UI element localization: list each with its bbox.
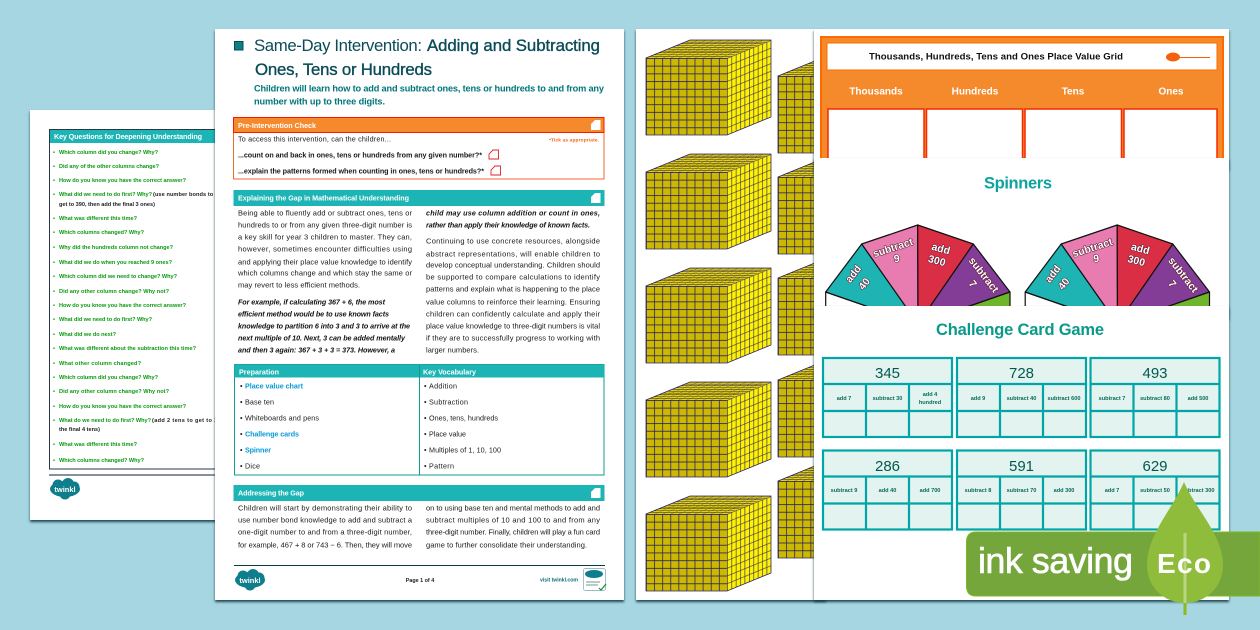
text block: explaining the gap right column: abstract representations, will enable children to	[426, 250, 600, 258]
question list: Did any other column change? Why not?	[59, 289, 170, 295]
subtitle: Children will learn how to add and subtract ones, tens or hundreds to and from any	[254, 84, 605, 94]
column headings: Ones	[1158, 86, 1184, 98]
panel: preparation and vocabulary table: •	[240, 462, 243, 470]
banner	[966, 532, 1260, 596]
card 493	[1090, 358, 1220, 437]
question list: How do you know you have the correct answer?	[59, 303, 187, 309]
chart: spinner right	[1025, 225, 1210, 330]
icon: checkbox	[491, 166, 500, 175]
card 286: add 700	[920, 488, 940, 494]
card 345: 345	[875, 365, 900, 382]
question list: What was different this time?	[59, 442, 138, 448]
icon: leaf	[1147, 482, 1223, 603]
question list: Did any other column change? Why not?	[59, 389, 170, 395]
question list: How do you know you have the correct answer?	[59, 404, 187, 410]
question list: the final 4 tens)	[59, 427, 100, 433]
text block: explaining the gap left column: which columns change and which stay the same or	[237, 268, 412, 278]
question list: What did we do when you reached 9 ones?	[59, 260, 173, 266]
chart: spinner left	[826, 225, 1010, 330]
card 629: subtract 50	[1140, 488, 1170, 494]
question list: •	[53, 216, 55, 222]
base ten cube column one	[646, 40, 771, 591]
question list: What was different this time?	[59, 216, 138, 222]
icon: twinkl logo	[50, 478, 80, 500]
heading: place value grid title	[827, 43, 1217, 70]
title	[254, 36, 600, 79]
grid cells	[828, 109, 1217, 169]
question list: What do we need to do first? Why?	[59, 418, 152, 424]
text block: addressing the gap: for example, 467 + 8 or 743 − 6. Then, they will move	[238, 540, 412, 550]
panel: preparation and vocabulary table: •	[240, 414, 243, 422]
card 345: subtract 30	[873, 396, 902, 402]
card 728	[957, 358, 1086, 437]
panel: key questions page	[30, 110, 230, 520]
title: Adding and Subtracting	[427, 36, 600, 55]
text block: explaining the gap right column: children can confidently calculate and apply their	[426, 310, 600, 318]
panel: preparation and vocabulary table: Pattern	[429, 462, 454, 470]
panel: preparation and vocabulary table: •	[240, 430, 243, 438]
text block: addressing the gap: one-digit number to and from a three-digit number,	[238, 528, 412, 536]
panel: pre-intervention check: ...explain the patterns formed when counting in ones, tens or hundreds?*	[238, 166, 484, 176]
panel: pre-intervention check	[234, 118, 604, 179]
panel: preparation and vocabulary table: •	[240, 446, 243, 454]
question list: (use number bonds to add	[153, 192, 226, 198]
question list: •	[53, 346, 55, 352]
column headings: Thousands	[849, 86, 903, 98]
text block: explaining the gap left column: and then 3 again: 367 + 3 + 3 = 373. However, a	[238, 346, 395, 354]
question list: get to 390, then add the final 3 ones)	[59, 202, 155, 208]
question list: Which columns changed? Why?	[59, 230, 145, 236]
card 591: add 300	[1054, 488, 1074, 494]
card 728: 728	[1009, 365, 1034, 382]
panel: preparation and vocabulary table: •	[424, 382, 427, 390]
question list: •	[53, 442, 55, 448]
question list: What was different about the subtraction this time?	[59, 346, 197, 352]
question list: •	[53, 289, 55, 295]
chart: spinner right: subtract	[1071, 236, 1115, 260]
footer link: visit twinkl.com	[540, 578, 578, 584]
question list: •	[53, 404, 55, 410]
card 286	[823, 450, 952, 530]
banner text: ink saving	[978, 540, 1133, 581]
question list: Which column did you change? Why?	[59, 150, 159, 156]
card 629: add 7	[1105, 488, 1119, 494]
question list: •	[53, 230, 55, 236]
text block: explaining the gap right column: patterns and explain what is happening to the place	[426, 284, 600, 294]
question list: •	[53, 418, 55, 424]
heading: key questions	[50, 130, 230, 143]
card 728: add 9	[971, 396, 985, 402]
question list: What did we do next?	[59, 332, 117, 338]
panel: preparation and vocabulary table: •	[424, 414, 427, 422]
panel: preparation and vocabulary table: Preparation	[239, 368, 279, 376]
card 493: add 500	[1188, 396, 1208, 402]
heading: key questions: Key Questions for Deepening Understanding	[54, 132, 202, 141]
card 493: subtract 80	[1140, 396, 1170, 402]
panel: pre-intervention check: *Tick as appropriate.	[549, 138, 599, 144]
question list: •	[53, 317, 55, 323]
question list: •	[53, 303, 55, 309]
page number: Page 1 of 4	[406, 578, 434, 584]
text block: explaining the gap left column	[237, 208, 412, 354]
card 591: subtract 70	[1007, 488, 1036, 494]
panel: preparation and vocabulary table: Dice	[245, 462, 260, 470]
icon: twinkl logo: twinkl	[239, 576, 261, 585]
question list: Which column did you change? Why?	[59, 375, 159, 381]
text block: explaining the gap right column: develop conceptual understanding. Children should	[426, 260, 600, 270]
question list: •	[53, 332, 55, 338]
panel: preparation and vocabulary table: •	[424, 430, 427, 438]
chart: spinner right: add	[1043, 263, 1064, 285]
question list: •	[53, 375, 55, 381]
panel: spinners page	[814, 158, 1229, 330]
text block: addressing the gap: Children will start by demonstrating their ability to	[238, 504, 412, 512]
chart: spinner right: 9	[1093, 253, 1100, 265]
question list: •	[53, 458, 55, 464]
subtitle: number with up to three digits.	[254, 96, 385, 106]
question list: •	[53, 361, 55, 367]
text block: explaining the gap right column: larger numbers.	[426, 346, 479, 354]
panel: preparation and vocabulary table: Subtraction	[429, 398, 468, 406]
text block: explaining the gap left column: hundreds to or from any given three-digit number is	[238, 220, 412, 230]
icon: checkbox	[489, 150, 498, 159]
text block: explaining the gap right column	[426, 208, 600, 354]
text block: explaining the gap right column: be supported to compare calculations to identify	[426, 272, 600, 282]
heading: challenge card game: Challenge Card Game	[936, 321, 1104, 339]
question list: •	[53, 274, 55, 280]
panel: base ten cubes page	[636, 29, 903, 600]
card 286: 286	[875, 458, 900, 475]
column headings: Hundreds	[952, 86, 999, 98]
chart: spinner right: 300	[1126, 253, 1146, 269]
title: Ones, Tens or Hundreds	[255, 60, 432, 79]
question list: •	[53, 192, 55, 198]
text block: explaining the gap right column: child may use column addition or count in ones,	[426, 208, 600, 218]
card 591: subtract 8	[965, 488, 991, 494]
panel: preparation and vocabulary table: Key Vocabulary	[423, 368, 476, 376]
panel: preparation and vocabulary table: Spinner	[245, 446, 271, 454]
question list: •	[53, 260, 55, 266]
column headings	[849, 86, 1184, 98]
chart: spinner left: subtract	[966, 255, 1001, 296]
text block: explaining the gap left column: Being able to fluently add or subtract ones, tens or	[238, 208, 412, 218]
chart: spinner left: 7	[966, 278, 979, 290]
card 493: 493	[1142, 365, 1168, 382]
heading: addressing the gap: Addressing the Gap	[238, 488, 305, 498]
panel: pre-intervention check: ...count on and back in ones, tens or hundreds from any given number?*	[238, 150, 482, 160]
base ten cube column two	[778, 58, 903, 558]
panel: preparation and vocabulary table: •	[424, 462, 427, 470]
text block: explaining the gap left column: a key skill for year 3 children to master. They can,	[238, 232, 412, 242]
chart: spinner left: add	[843, 263, 864, 285]
card 286: subtract 9	[831, 488, 857, 494]
text block: explaining the gap left column: however, sometimes encounter difficulties using	[238, 244, 412, 254]
panel: preparation and vocabulary table	[234, 364, 604, 475]
question list: What other column changed?	[59, 361, 142, 367]
card 591	[957, 450, 1086, 530]
text block: explaining the gap right column: value columns to reinforce their learning. Ensuring	[426, 298, 600, 306]
card 728: subtract 40	[1007, 396, 1036, 402]
chart: spinner left: subtract	[872, 236, 915, 260]
panel: preparation and vocabulary table: Place value	[429, 430, 466, 438]
heading: explaining the gap	[234, 190, 604, 206]
icon: quality badge	[584, 568, 606, 590]
panel: preparation and vocabulary table: Challenge cards	[245, 430, 299, 438]
panel: preparation and vocabulary table: Multiples of 1, 10, 100	[429, 446, 501, 454]
card 345: add 7	[837, 396, 851, 402]
question list: •	[53, 178, 55, 184]
question list: Which columns changed? Why?	[59, 458, 145, 464]
icon: twinkl logo: twinkl	[54, 485, 76, 494]
icon: twinkl logo	[235, 569, 265, 590]
key questions box	[50, 130, 230, 469]
question list: What did we need to do first? Why?	[59, 317, 153, 323]
text block: explaining the gap left column: efficient method would be to use known facts	[238, 310, 389, 318]
question list: (add 2 tens to get to 304,	[152, 418, 226, 424]
card 345	[823, 358, 952, 437]
text block: explaining the gap left column: and applying their place value knowledge to identify	[238, 258, 412, 266]
text block: explaining the gap left column: For example, if calculating 367 + 6, the most	[238, 298, 386, 306]
panel: place value grid page	[814, 29, 1229, 169]
question list: •	[53, 150, 55, 156]
card 728: subtract 600	[1048, 396, 1080, 402]
card 629	[1090, 450, 1220, 530]
chart: spinner left: add	[930, 241, 951, 257]
text block: explaining the gap left column: may revert to less efficient methods.	[238, 280, 360, 290]
badge: ink saving eco	[966, 482, 1260, 615]
card 345: add 4	[923, 392, 938, 398]
question list: Did any of the other columns change?	[59, 164, 160, 170]
panel: preparation and vocabulary table: Place value chart	[245, 382, 304, 390]
text block: addressing the gap	[238, 504, 600, 550]
panel: preparation and vocabulary table: Base ten	[245, 398, 274, 406]
panel: main intervention page	[215, 29, 624, 600]
card 629: 629	[1142, 458, 1168, 475]
chart: spinner left: 40	[856, 276, 873, 292]
text block: explaining the gap right column: place value knowledge to three-digit numbers is vital	[426, 322, 600, 330]
chart: spinner left: 9	[893, 253, 900, 265]
text block: addressing the gap: use number bond knowledge to add and subtract a	[238, 516, 413, 524]
column headings: Tens	[1062, 86, 1085, 98]
question list: Which column did we need to change? Why?	[59, 274, 178, 280]
heading: addressing the gap	[234, 485, 604, 501]
question list: Why did the hundreds column not change?	[59, 245, 174, 251]
text block: explaining the gap right column: if they are to successfully progress to working with	[426, 334, 600, 342]
heading: explaining the gap: Explaining the Gap in Mathematical Understanding	[238, 194, 409, 202]
title: Same-Day Intervention:	[254, 36, 422, 55]
panel: preparation and vocabulary table: •	[240, 398, 243, 406]
chart: spinner left: 300	[927, 253, 947, 269]
icon: title square	[234, 42, 243, 50]
card 493: subtract 7	[1099, 396, 1125, 402]
question list: How do you know you have the correct answer?	[59, 178, 187, 184]
panel: pre-intervention check: Pre-Intervention Check	[238, 121, 316, 130]
text block: addressing the gap: on to using base ten and mental methods to add and	[426, 504, 600, 512]
card 591: 591	[1009, 458, 1034, 475]
chart: spinner right: add	[1130, 241, 1151, 257]
text block: explaining the gap left column: knowledge to partition 6 into 3 and 3 to arrive at the	[238, 322, 410, 330]
question list: •	[53, 164, 55, 170]
question list: •	[53, 389, 55, 395]
panel: pre-intervention check: To access this intervention, can the children...	[238, 134, 391, 144]
panel: preparation and vocabulary table: •	[424, 446, 427, 454]
text block: explaining the gap left column: next multiple of 10. Next, 3 can be added mentally	[238, 334, 406, 342]
panel: preparation and vocabulary table: •	[424, 398, 427, 406]
subtitle	[254, 84, 605, 106]
card 629: subtract 300	[1182, 488, 1214, 494]
panel: preparation and vocabulary table: Ones, tens, hundreds	[429, 414, 498, 422]
text block: addressing the gap: three-digit number. Finally, children will play a fun card	[426, 528, 600, 536]
panel: preparation and vocabulary table: Addition	[429, 382, 457, 390]
chart: spinner right: 7	[1165, 278, 1178, 290]
question list	[53, 150, 226, 464]
panel: challenge card game page	[814, 306, 1229, 600]
leaf text: Eco	[1157, 548, 1211, 579]
chart: spinner right: subtract	[1165, 255, 1201, 296]
panel: preparation and vocabulary table: Whiteboards and pens	[245, 414, 319, 422]
heading: place value grid title: Thousands, Hundreds, Tens and Ones Place Value Grid	[869, 52, 1123, 62]
text block: addressing the gap: game to further consolidate their understanding.	[426, 540, 587, 550]
card 286: add 40	[879, 488, 896, 494]
question list: •	[53, 245, 55, 251]
panel: preparation and vocabulary table: •	[240, 382, 243, 390]
text block: explaining the gap right column: Continuing to use concrete resources, alongside	[426, 236, 600, 246]
text block: explaining the gap right column: rather than apply their knowledge of known facts.	[426, 220, 590, 230]
heading: spinners: Spinners	[984, 174, 1052, 192]
question list: What did we need to do first? Why?	[59, 192, 153, 198]
card 345: hundred	[919, 400, 942, 406]
chart: spinner right: 40	[1056, 276, 1073, 292]
text block: addressing the gap: subtract multiples of 10 and 100 to and from any	[426, 516, 600, 524]
